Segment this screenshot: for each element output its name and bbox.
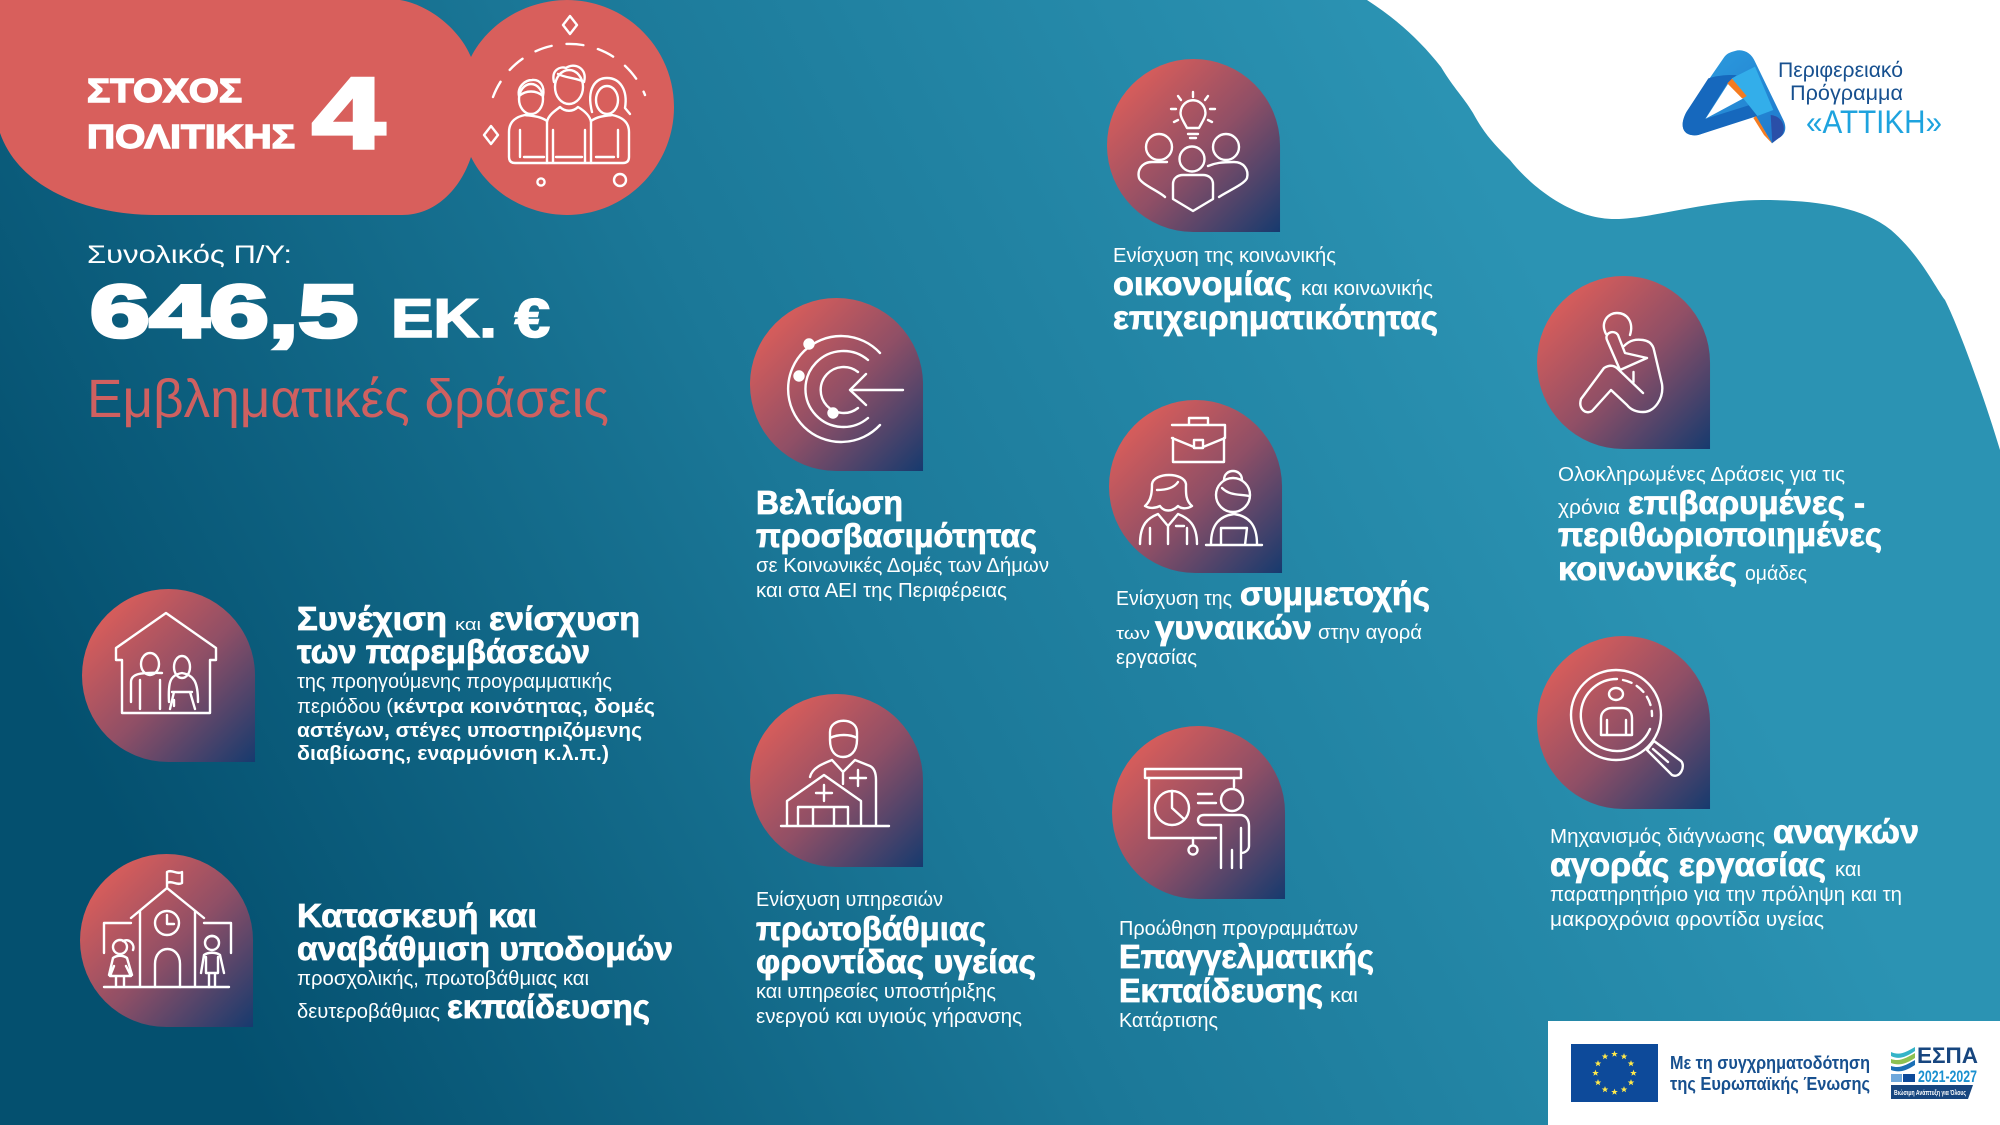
text: needs diagnosis mechanism <box>1550 813 1919 931</box>
text: construction and upgrade: αναβάθμιση υποδομών <box>297 930 673 967</box>
text: vocational education: και <box>1330 985 1358 1007</box>
logo: ESPA 2021-2027 <box>1891 1043 1978 1099</box>
text: long-term burdened groups <box>1558 464 1882 587</box>
text: needs diagnosis mechanism: μακροχρόνια φροντίδα υγείας <box>1550 909 1824 931</box>
text: continuation and strengthening: διαβίωσης, εναρμόνιση κ.λ.π.) <box>297 743 609 765</box>
text: continuation and strengthening: αστέγων, στέγες υποστηριζόμενης <box>297 720 642 742</box>
text: primary care services: και υπηρεσίες υποστήριξης <box>756 981 996 1003</box>
text: accessibility improvement: και στα ΑΕΙ της Περιφέρειας <box>756 580 1007 602</box>
text: needs diagnosis mechanism: αναγκών <box>1773 813 1919 850</box>
icon: EU flag <box>1571 1044 1658 1102</box>
text: vocational education: Κατάρτισης <box>1119 1010 1218 1032</box>
text: continuation and strengthening: περιόδου ( <box>297 696 393 718</box>
text: long-term burdened groups: επιβαρυμένες - <box>1628 484 1865 521</box>
panel: funding footer <box>1548 1021 2000 1125</box>
text: social economy and entrepreneurship: οικονομίας <box>1113 265 1292 302</box>
text: accessibility improvement: Βελτίωση <box>756 484 903 521</box>
drop badge with presenter icon <box>1112 726 1285 899</box>
section heading: flagship actions: Εμβληματικές δράσεις <box>87 369 609 429</box>
text: social economy and entrepreneurship <box>1113 245 1438 336</box>
logo: ESPA 2021-2027: Βιώσιμη Ανάπτυξη για Όλους <box>1894 1089 1966 1097</box>
logo: ESPA 2021-2027: ΕΣΠΑ <box>1917 1043 1978 1068</box>
text: construction and upgrade: Κατασκευή και <box>297 897 537 934</box>
text: women's participation: συμμετοχής <box>1240 575 1430 612</box>
panel: social economy <box>1107 59 1438 336</box>
text: women's participation <box>1116 575 1430 669</box>
text: social economy and entrepreneurship: επιχειρηματικότητας <box>1113 299 1438 336</box>
logo text: Περιφερειακό <box>1778 59 1903 82</box>
text: vocational education: Επαγγελματικής <box>1119 938 1374 975</box>
text: accessibility improvement: προσβασιμότητας <box>756 517 1037 554</box>
text: women's participation: γυναικών <box>1155 609 1312 646</box>
text: women's participation: των <box>1116 624 1150 643</box>
text: construction and upgrade <box>297 897 673 1025</box>
text: vocational education <box>1119 918 1374 1032</box>
title: policy goal: ΣΤΟΧΟΣ <box>87 72 242 109</box>
text: accessibility improvement: σε Κοινωνικές Δομές των Δήμων <box>756 555 1049 577</box>
drop badge with school icon <box>80 854 253 1027</box>
text: continuation and strengthening: Συνέχιση <box>297 600 447 637</box>
text: long-term burdened groups: Ολοκληρωμένες Δράσεις για τις <box>1558 464 1845 486</box>
text: continuation and strengthening <box>297 600 655 765</box>
text: co-funding statement: της Ευρωπαϊκής Ένωσης <box>1670 1074 1870 1094</box>
panel: vocational training <box>1112 726 1374 1032</box>
text: construction and upgrade: προσχολικής, πρωτοβάθμιας και <box>297 968 589 990</box>
text: continuation and strengthening: ενίσχυση <box>489 600 640 637</box>
text: primary care services: Ενίσχυση υπηρεσιών <box>756 889 943 911</box>
panel: primary health care <box>750 694 1036 1028</box>
logo text: «ΑΤΤΙΚΗ» <box>1806 104 1942 140</box>
budget amount: 646,5 <box>90 270 358 353</box>
text: continuation and strengthening: της προηγούμενης προγραμματικής <box>297 671 612 693</box>
title: policy goal <box>87 72 295 155</box>
text: long-term burdened groups: περιθωριοποιημένες <box>1558 516 1882 553</box>
text: continuation and strengthening: των παρεμβάσεων <box>297 633 590 670</box>
title: policy goal: ΠΟΛΙΤΙΚΗΣ <box>87 118 295 155</box>
panel: women's participation <box>1109 400 1430 669</box>
drop badge with women and briefcase icon <box>1109 400 1282 573</box>
text: women's participation: εργασίας <box>1116 647 1197 669</box>
panel: policy goal header <box>0 0 674 215</box>
footer white box <box>1548 1021 2000 1125</box>
budget block <box>87 241 550 353</box>
text: women's participation: Ενίσχυση της <box>1116 588 1232 610</box>
text: primary care services: πρωτοβάθμιας <box>756 910 986 947</box>
header pill shape <box>0 0 674 215</box>
budget label: Συνολικός Π/Υ: <box>87 241 292 269</box>
text: needs diagnosis mechanism: παρατηρητήριο για την πρόληψη και τη <box>1550 884 1902 906</box>
logo: ESPA 2021-2027: 2021-2027 <box>1918 1067 1977 1086</box>
drop badge with accessibility icon <box>750 298 923 471</box>
text: women's participation: στην αγορά <box>1318 622 1422 644</box>
panel: accessibility <box>750 298 1049 602</box>
drop badge with house icon <box>82 589 255 762</box>
panel: marginalised groups <box>1537 276 1882 587</box>
drop badge with magnifier icon <box>1537 636 1710 809</box>
text: construction and upgrade: δευτεροβάθμιας <box>297 1001 440 1023</box>
text: social economy and entrepreneurship: και κοινωνικής <box>1301 278 1433 300</box>
text: co-funding statement: Με τη συγχρηματοδότηση <box>1670 1053 1870 1073</box>
text: vocational education: Προώθηση προγραμμάτων <box>1119 918 1358 940</box>
panel: education infrastructure <box>80 854 673 1027</box>
white corner wave <box>1367 0 2000 450</box>
text: primary care services: ενεργού και υγιούς γήρανσης <box>756 1006 1022 1028</box>
text: co-funding statement <box>1670 1053 1870 1094</box>
goal number: 4 <box>312 58 385 170</box>
text: primary care services: φροντίδας υγείας <box>756 943 1036 980</box>
text: social economy and entrepreneurship: Ενίσχυση της κοινωνικής <box>1113 245 1336 267</box>
text: long-term burdened groups: ομάδες <box>1745 563 1807 585</box>
text: continuation and strengthening: και <box>455 615 481 634</box>
text: primary care services <box>756 889 1036 1028</box>
text: long-term burdened groups: κοινωνικές <box>1558 550 1737 587</box>
text: continuation and strengthening: κέντρα κοινότητας, δομές <box>393 696 655 718</box>
text: accessibility improvement <box>756 484 1049 602</box>
text: needs diagnosis mechanism: και <box>1835 859 1861 881</box>
budget unit: ΕΚ. € <box>391 287 550 349</box>
text: needs diagnosis mechanism: Μηχανισμός διάγνωσης <box>1550 826 1765 848</box>
drop badge with sitting person icon <box>1537 276 1710 449</box>
text: needs diagnosis mechanism: αγοράς εργασίας <box>1550 846 1826 883</box>
panel: continuation of interventions <box>82 589 655 765</box>
text: construction and upgrade: εκπαίδευσης <box>447 988 650 1025</box>
logo mark <box>1683 50 1785 143</box>
drop badge with bulb and people icon <box>1107 59 1280 232</box>
icon: group of people <box>484 16 645 186</box>
logo text <box>1778 59 1942 140</box>
logo: Attica regional programme <box>1683 50 1942 143</box>
drop badge with doctor icon <box>750 694 923 867</box>
logo text: Πρόγραμμα <box>1790 82 1903 105</box>
text: long-term burdened groups: χρόνια <box>1558 497 1620 519</box>
panel: labour market diagnosis <box>1537 636 1919 931</box>
text: vocational education: Εκπαίδευσης <box>1119 972 1323 1009</box>
